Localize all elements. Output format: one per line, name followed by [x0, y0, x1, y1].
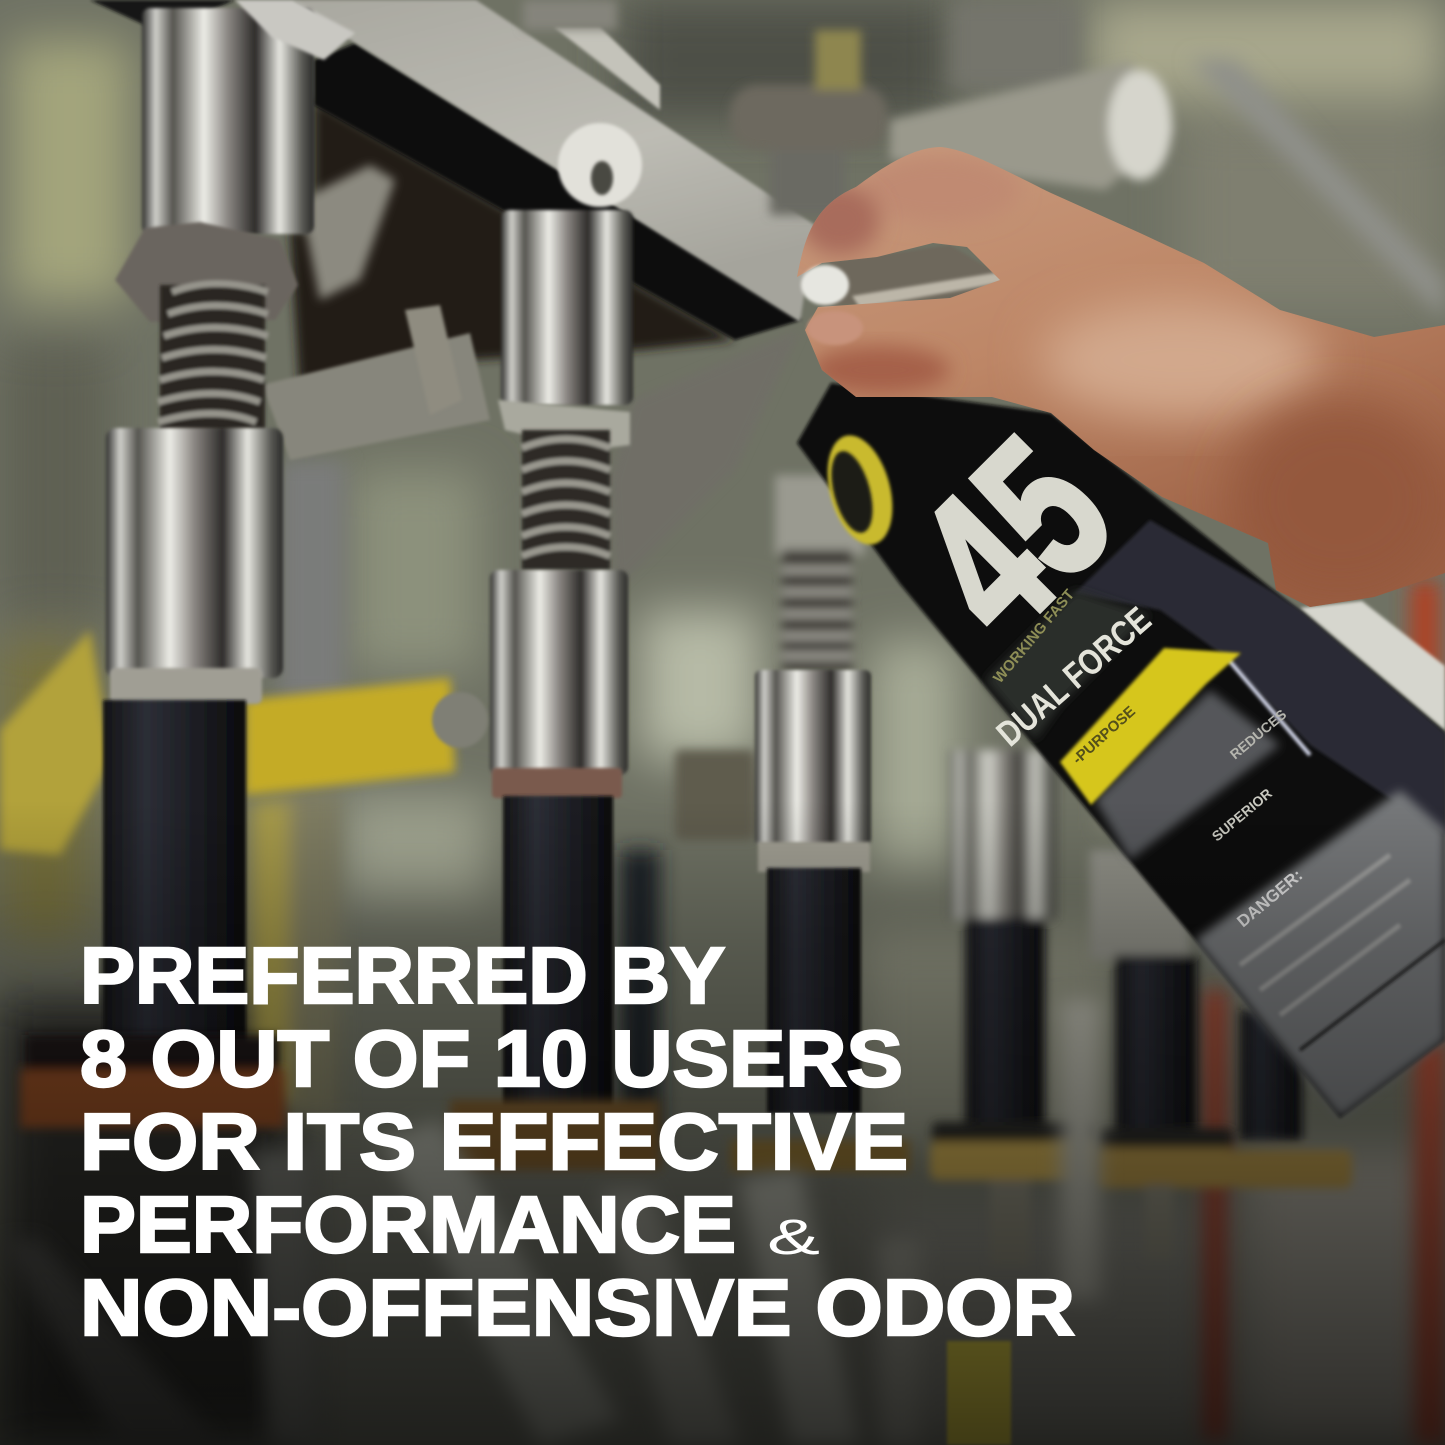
dual force label: DUAL FORCE	[988, 598, 1159, 754]
clamp over rail	[235, 0, 355, 60]
spring	[158, 284, 268, 430]
spray can	[797, 383, 1445, 1118]
dark tube	[103, 700, 246, 1045]
line 2: 8 OUT OF 10 USERS	[80, 1014, 903, 1103]
ampersand: &	[767, 1209, 820, 1265]
superior text: SUPERIOR	[1209, 785, 1275, 844]
chrome sleeve top	[142, 8, 314, 234]
column 3 fittings	[523, 0, 910, 1172]
column 4 fittings	[930, 750, 1092, 1265]
bottom shade	[0, 800, 1445, 1445]
column 5 and 6 fittings	[1090, 850, 1352, 1260]
rail top face	[293, 0, 815, 322]
line 3: FOR ITS EFFECTIVE	[80, 1097, 908, 1186]
chrome sleeve middle	[106, 428, 283, 678]
45 number: 45	[874, 398, 1153, 676]
white strip behind can	[1300, 601, 1445, 730]
line 1: PREFERRED BY	[80, 931, 725, 1020]
can body	[797, 383, 1445, 1118]
hex nut	[115, 222, 298, 322]
brand badge	[817, 428, 903, 552]
lower mottled panel	[1195, 790, 1445, 1118]
reduces text: REDUCES	[1227, 706, 1289, 762]
yellow lower pipe	[947, 1341, 1011, 1445]
yellow band	[0, 630, 455, 855]
purpose text on yellow: -PURPOSE	[1069, 703, 1139, 768]
line 5: NON-OFFENSIVE ODOR	[80, 1263, 1075, 1352]
thumb nail	[807, 311, 863, 345]
hand	[790, 140, 1445, 620]
mottled band	[1095, 690, 1280, 860]
hose clamp	[405, 305, 462, 415]
headline	[80, 931, 1075, 1352]
white nozzle	[801, 265, 849, 305]
cap silver rim	[852, 272, 1005, 308]
highlight streak	[1227, 658, 1310, 755]
working fast text: WORKING FAST	[990, 586, 1078, 687]
cap	[818, 245, 1005, 305]
yellow label bar	[1060, 648, 1241, 805]
line 4: PERFORMANCE	[80, 1180, 736, 1269]
ribbed hose	[262, 333, 490, 460]
grey spray backdrop	[610, 330, 800, 590]
danger text streaks	[1240, 855, 1410, 1015]
dark blue shoulder band	[1074, 520, 1445, 835]
metal rail	[90, 0, 815, 340]
collar	[110, 668, 262, 704]
lower pipes in shadow	[0, 1000, 1100, 1445]
rail underside	[314, 43, 802, 340]
column 1 fittings	[20, 0, 355, 1128]
top block behind rail	[554, 27, 660, 110]
olive centre strip	[985, 590, 1150, 740]
palm and forearm	[790, 140, 1445, 620]
washer	[558, 123, 642, 207]
can base line	[1300, 940, 1445, 1050]
lower disc	[20, 1035, 285, 1128]
danger word: DANGER:	[1233, 866, 1306, 931]
dark bar top left	[90, 0, 235, 32]
wrench handle top right	[890, 62, 1175, 190]
column 2 fittings	[432, 210, 660, 1170]
bracket behind the rail	[262, 100, 800, 590]
